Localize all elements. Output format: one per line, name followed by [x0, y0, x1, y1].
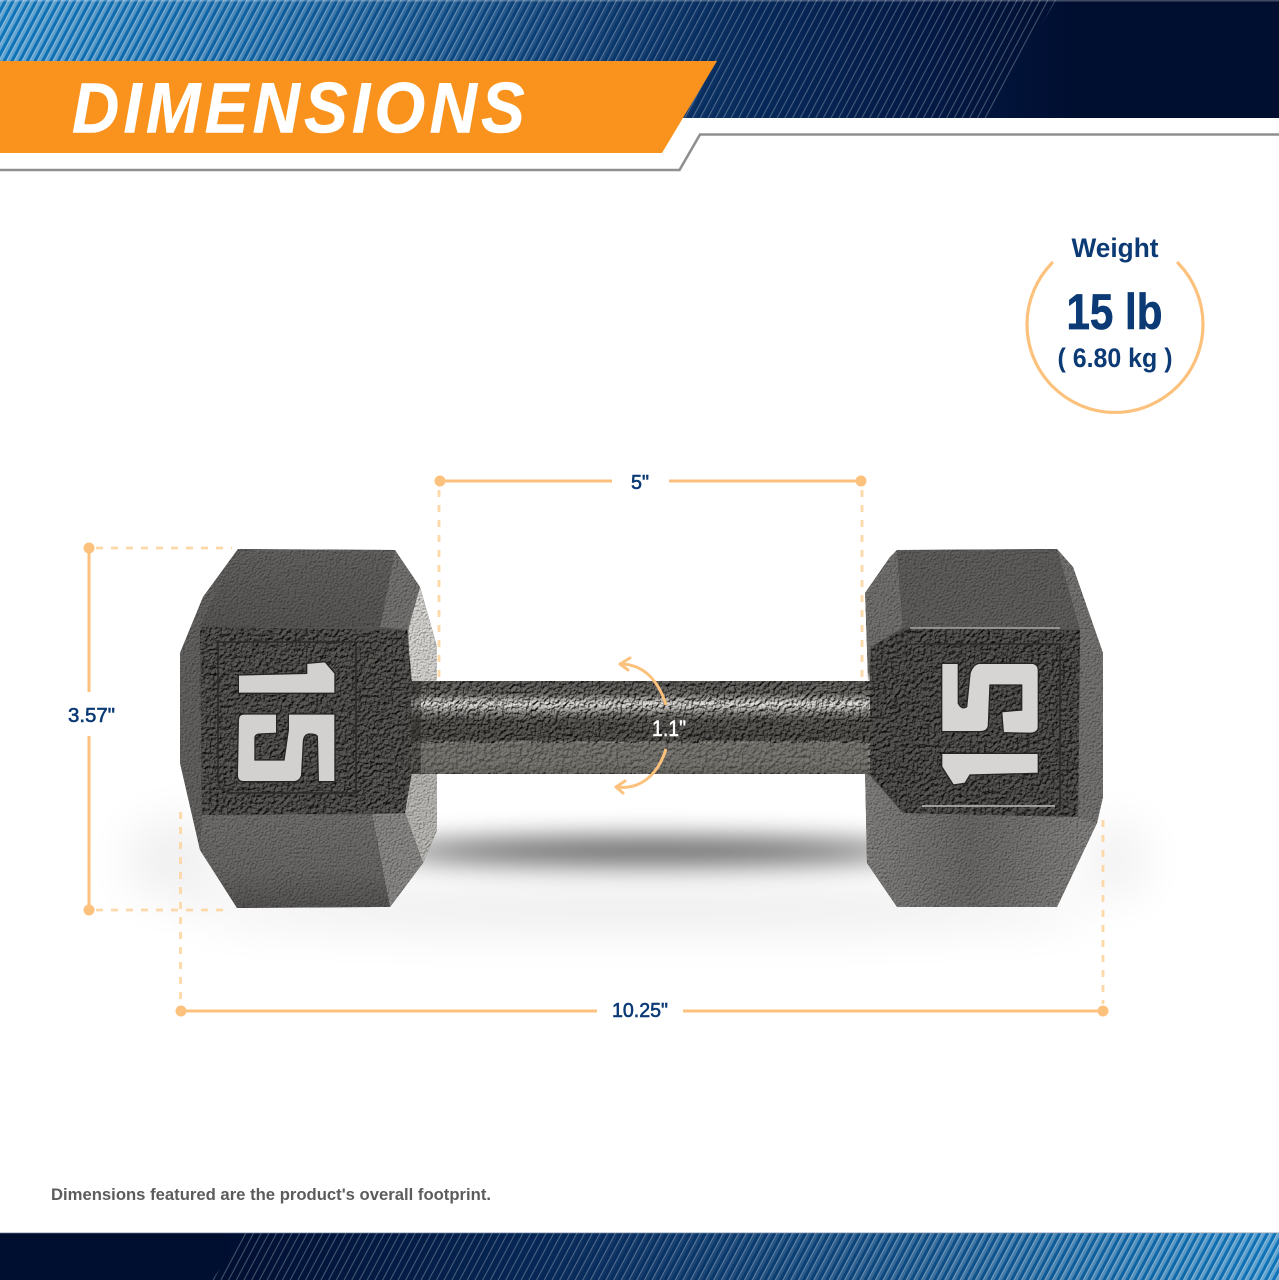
guide: height and length dashes: [96, 548, 1103, 1004]
floor shadow: [125, 818, 1145, 930]
left 15 numeral: [237, 662, 335, 782]
dimension: handle diameter 1.1 inch: 1.1": [652, 716, 686, 741]
weight badge: Weight: [1072, 233, 1158, 263]
right face inset frame: [910, 628, 1060, 806]
weight badge: [1027, 233, 1203, 412]
right 15 numeral: [942, 663, 1038, 785]
dimension: height 3.57 inch: [68, 542, 115, 916]
dimension: handle length 5 inch: 5": [631, 472, 649, 494]
guide: 5 inch dashes: [439, 490, 862, 682]
left face inset frame: [218, 642, 356, 793]
right head silhouette: [865, 549, 1103, 907]
handle: [411, 681, 870, 774]
footnote: Dimensions featured are the product's overall footprint.: [51, 1186, 491, 1204]
right hex head: [865, 549, 1103, 907]
header grey rule: [0, 134, 1279, 170]
weight badge: ( 6.80 kg ): [1058, 343, 1172, 373]
header band: [0, 0, 1279, 118]
right head front face: [867, 628, 1080, 817]
dumbbell photo: [180, 549, 1103, 908]
dimension: height 3.57 inch: 3.57": [68, 705, 115, 727]
dimension: total length 10.25 inch: 10.25": [612, 1000, 668, 1022]
left head front face: [200, 627, 412, 815]
right head facets: [865, 549, 1103, 907]
dimension: handle diameter 1.1 inch: [616, 658, 686, 793]
left hex head: [180, 549, 437, 908]
title banner: [0, 61, 717, 153]
footer band: [0, 1232, 1279, 1280]
dimension: handle length 5 inch: [434, 472, 866, 494]
weight badge: 15 lb: [1066, 284, 1162, 340]
left head silhouette: [180, 549, 437, 908]
title: DIMENSIONS: [72, 69, 525, 148]
dimension: total length 10.25 inch: [176, 1000, 1108, 1022]
left head facets: [180, 549, 437, 908]
